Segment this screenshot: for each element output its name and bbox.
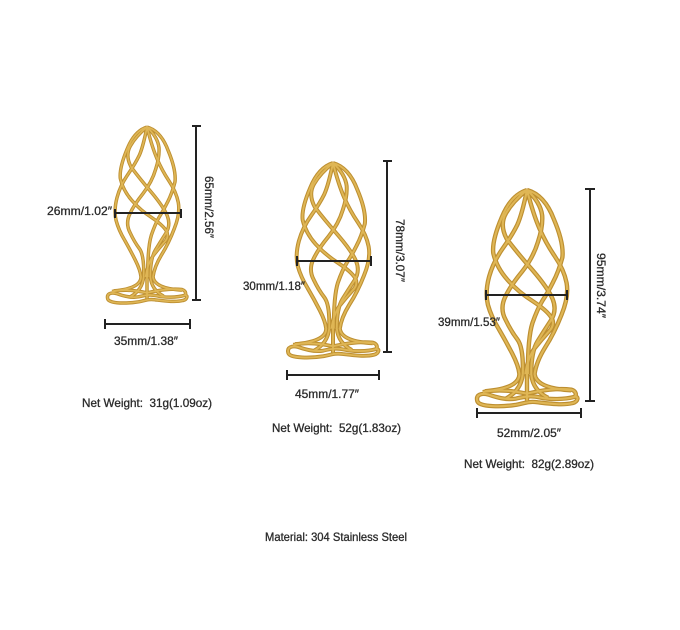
label: small net weight: Net Weight: 31g(1.09oz)	[82, 396, 212, 410]
dimension: medium base width	[287, 370, 379, 380]
label: large body width: 39mm/1.53″	[438, 315, 501, 329]
label: small height: 65mm/2.56″	[202, 176, 216, 239]
label: large net weight: Net Weight: 82g(2.89oz)	[464, 457, 594, 471]
dimension: small base width	[105, 319, 190, 329]
label: large base width: 52mm/2.05″	[497, 426, 562, 440]
dimension: medium height	[383, 161, 392, 352]
label: small body width: 26mm/1.02″	[47, 204, 113, 218]
label: small base width: 35mm/1.38″	[114, 334, 179, 348]
label: medium base width: 45mm/1.77″	[295, 387, 360, 401]
dimension: large base width	[477, 408, 581, 418]
product 2: medium plug	[288, 163, 378, 358]
dimension: small body width	[115, 209, 181, 218]
product 1: small plug	[107, 127, 187, 303]
label: medium body width: 30mm/1.18″	[243, 279, 306, 293]
material note: Material: 304 Stainless Steel	[265, 530, 407, 544]
dimension: small height	[192, 126, 201, 300]
label: medium height: 78mm/3.07″	[393, 219, 407, 283]
product 3: large plug	[477, 190, 577, 406]
dimension: large height	[585, 189, 595, 401]
label: large height: 95mm/3.74″	[594, 253, 608, 319]
dimension: large body width	[486, 290, 567, 300]
label: medium net weight: Net Weight: 52g(1.83oz)	[272, 421, 401, 435]
dimension: medium body width	[297, 256, 371, 266]
